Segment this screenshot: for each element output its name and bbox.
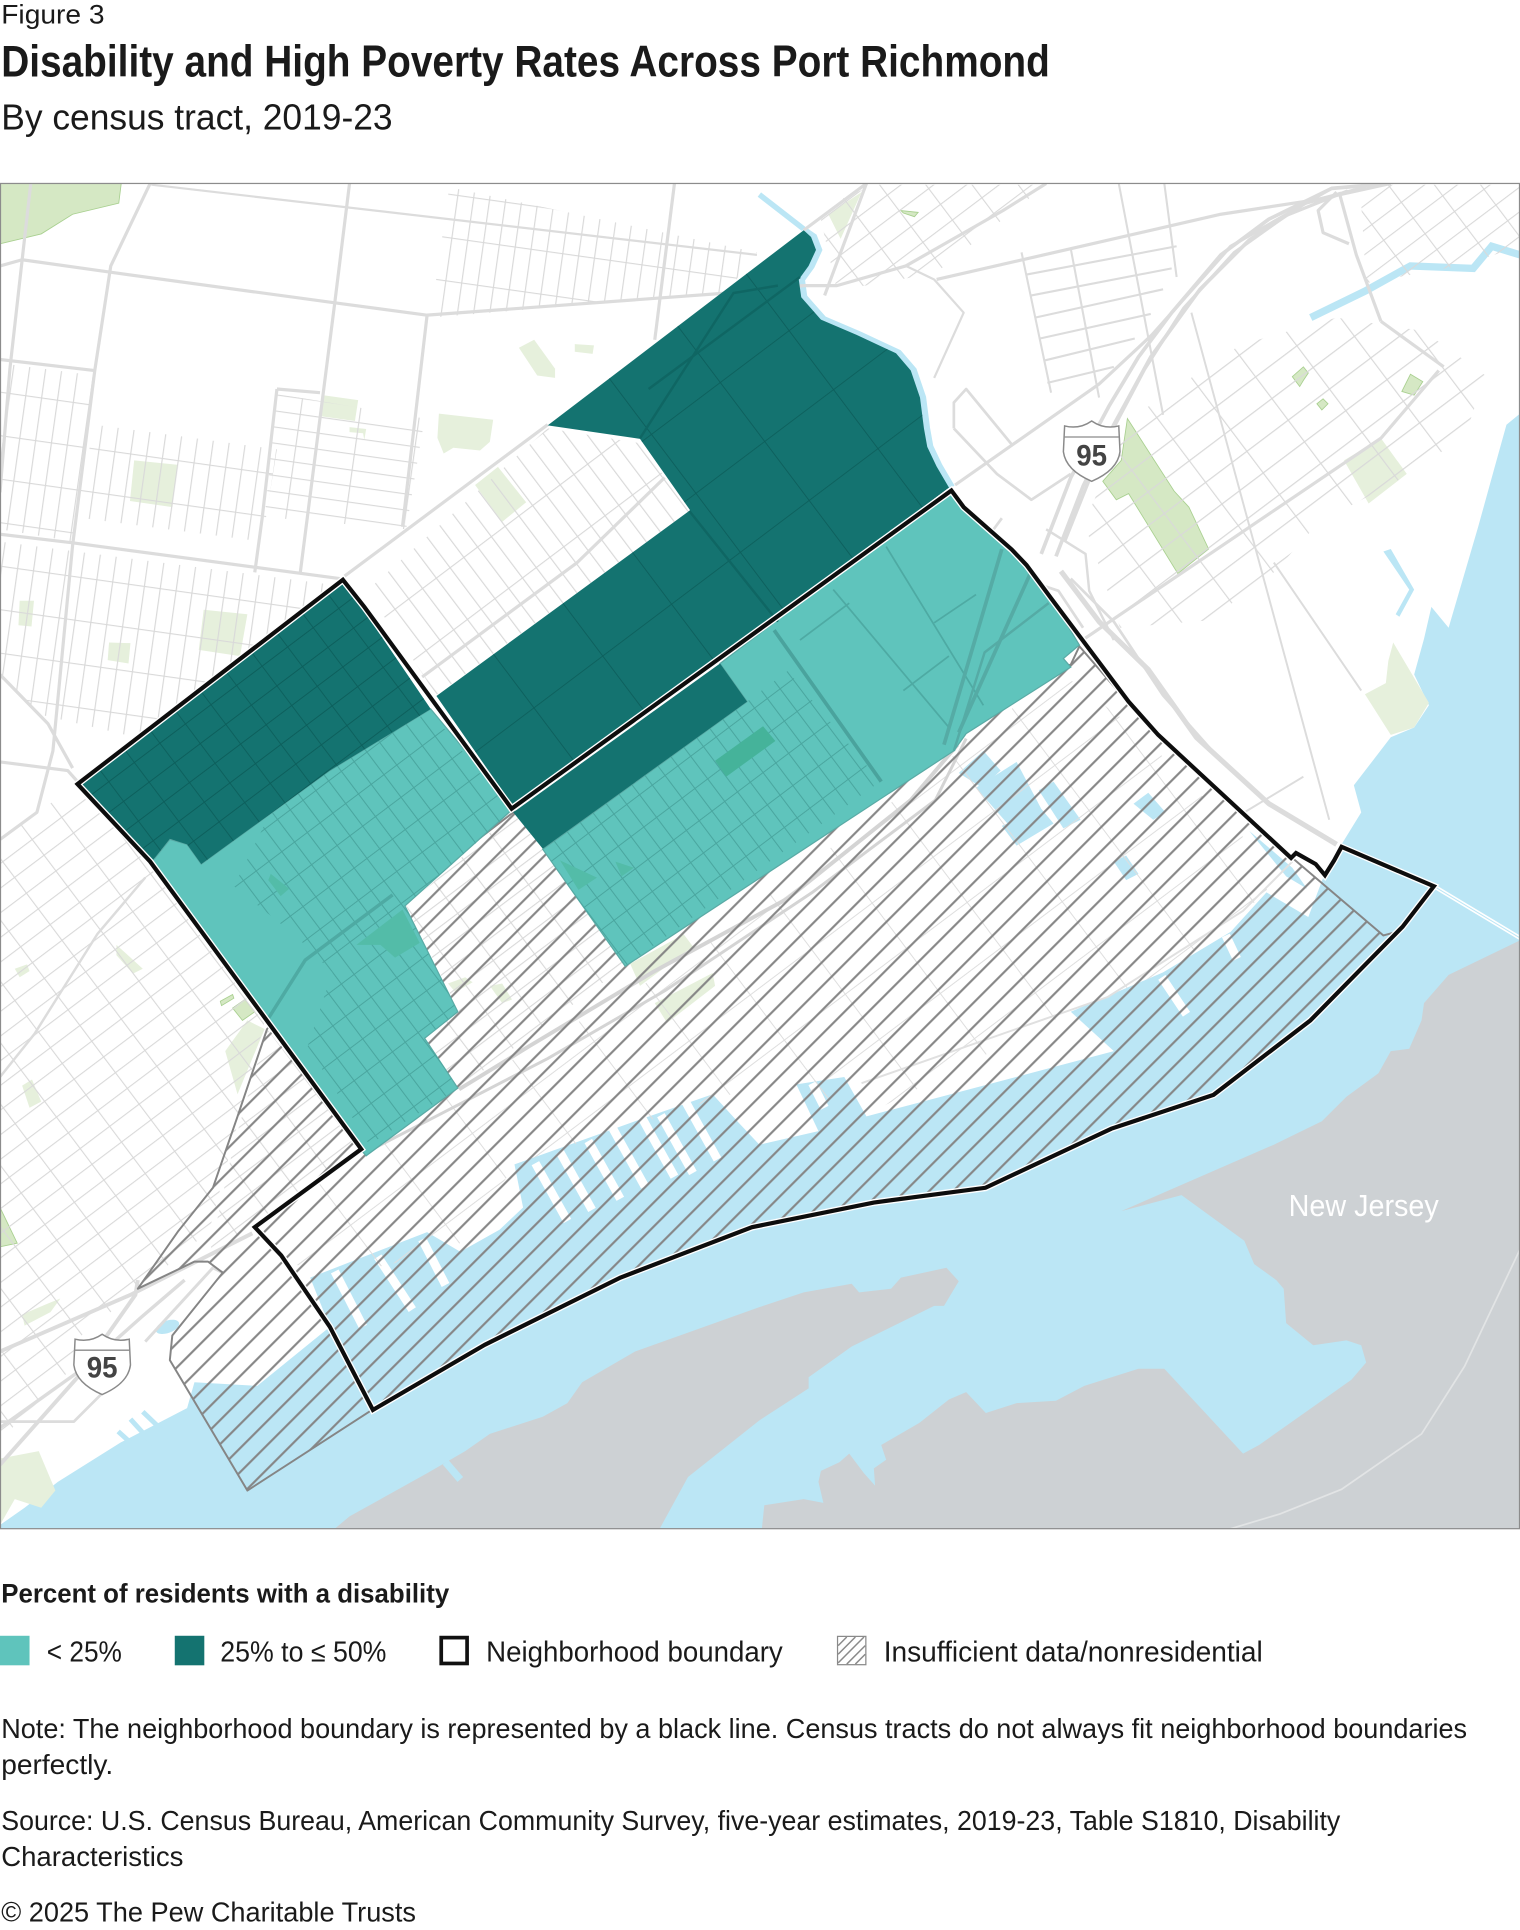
icon: I-95 shield southwest: 95 [87,1351,118,1384]
icon: I-95 shield northeast [1063,421,1120,481]
river creeks and jetties [118,195,1520,1446]
parks [0,183,1429,1525]
legend heading: Percent of residents with a disability [1,1578,449,1609]
water: Delaware River [0,414,1520,1529]
panel: map [0,183,1520,1529]
source [1,1805,1340,1872]
tract: western dark teal, 25% to 50% [78,580,431,864]
legend label: under 25%: < 25% [47,1636,122,1668]
tract: middle light teal, under 25% [543,492,1079,966]
tract: western light teal, under 25% [151,709,513,1156]
New Jersey road [1231,1249,1520,1529]
legend label: neighborhood boundary: Neighborhood boundary [486,1636,784,1668]
note: Note: The neighborhood boundary is represented by a black line. Census tracts do not always fit neighborhood boundaries [1,1713,1467,1744]
tract: small dark teal strip, 25% to 50% [513,663,747,849]
legend swatch: insufficient data [838,1636,866,1665]
subtitle: By census tract, 2019-23 [1,97,393,137]
land: river island [335,1268,959,1529]
note: perfectly. [1,1749,113,1780]
icon: I-95 shield northeast: 95 [1076,439,1107,472]
source: Characteristics [1,1841,183,1872]
title: Disability and High Poverty Rates Across Port Richmond [1,37,1050,86]
note [1,1713,1467,1780]
map frame [0,183,1520,1529]
copyright: © 2025 The Pew Charitable Trusts [1,1896,416,1927]
legend label: insufficient data: Insufficient data/nonresidential [884,1636,1263,1668]
main roads [0,183,1444,1465]
small blue inlet on island [446,1462,460,1479]
bridge [1434,886,1520,938]
land: New Jersey mainland [762,940,1520,1529]
source: Source: U.S. Census Bureau, American Community Survey, five-year estimates, 2019-23, Table S1810, Disability [1,1805,1340,1836]
hatched area: insufficient data [138,646,1397,1491]
label: New Jersey: New Jersey [1289,1188,1439,1223]
icon: I-95 shield southwest [74,1334,130,1395]
white piers [335,935,1237,1327]
legend label: 25% to 50%: 25% to ≤ 50% [220,1636,386,1668]
legend [0,1578,1263,1668]
legend swatch: 25% to 50% [175,1636,204,1665]
neighborhood boundary [78,491,1434,1410]
tract: northern dark teal, 25% to 50% [436,230,949,806]
legend swatch: under 25% [0,1636,30,1665]
legend swatch: neighborhood boundary [441,1638,467,1663]
street grids [0,185,1520,1440]
bridge centre line [1434,886,1520,938]
